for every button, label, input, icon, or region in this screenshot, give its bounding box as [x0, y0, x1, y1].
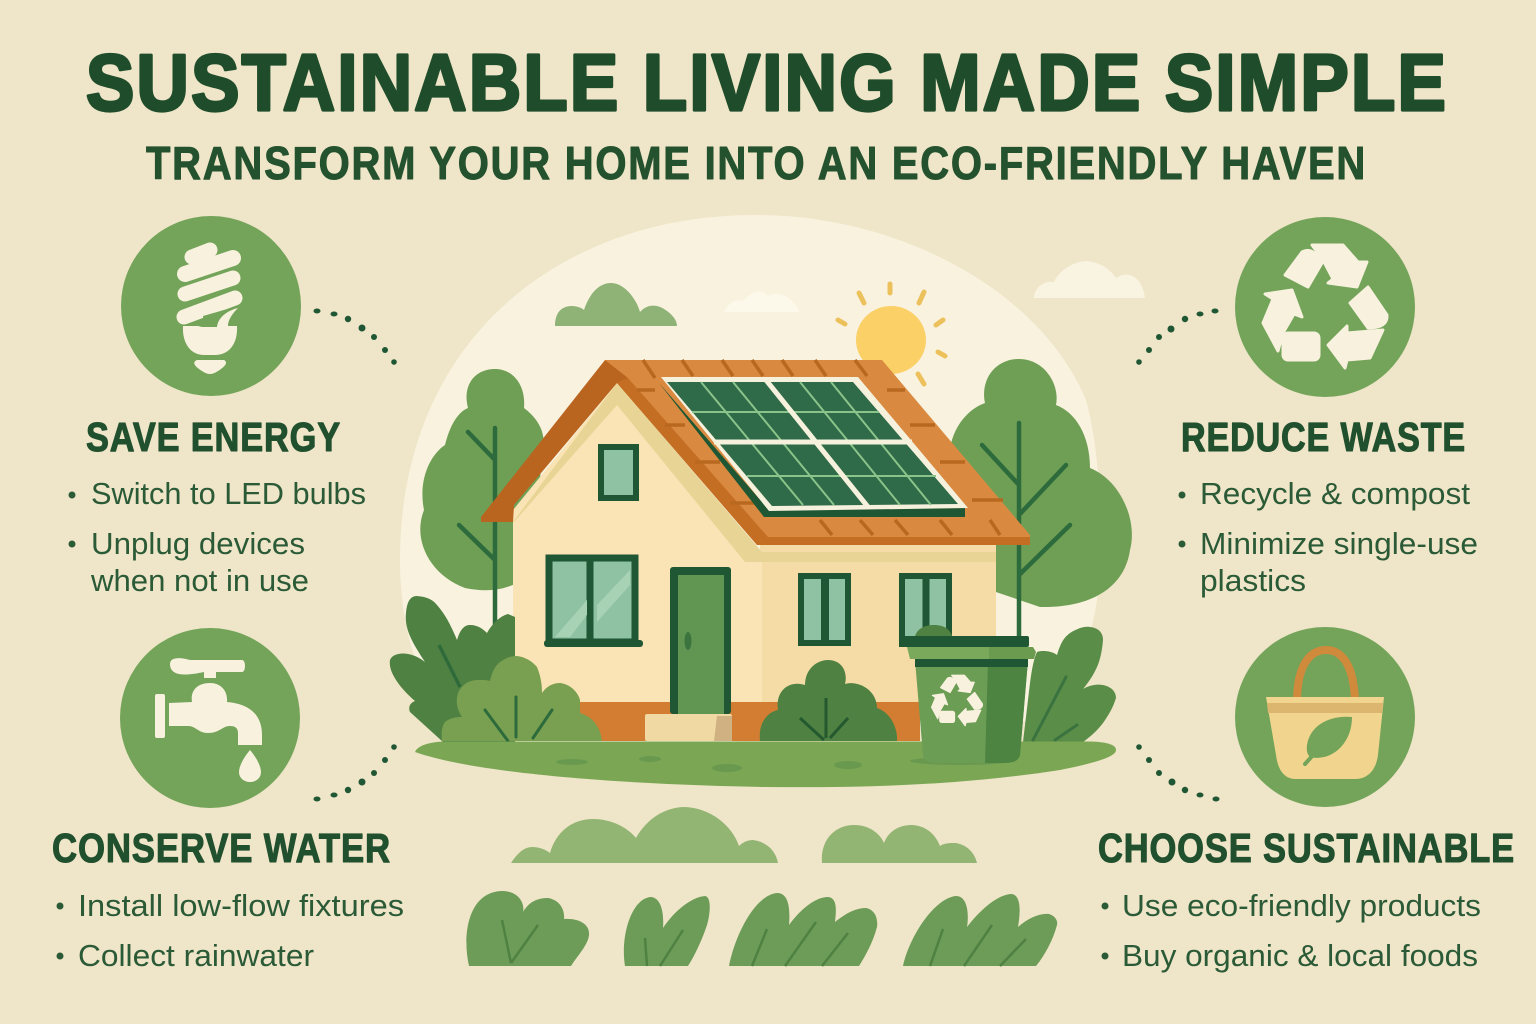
- connector dots: [1136, 744, 1220, 802]
- list: [56, 888, 404, 973]
- recycling bin: [900, 625, 1036, 765]
- window: attic: [601, 447, 636, 498]
- list: [68, 476, 366, 598]
- window: large: [544, 558, 643, 647]
- panel: save energy: [68, 216, 397, 598]
- list: Use eco-friendly products: [1122, 888, 1481, 923]
- window: right two: [902, 576, 949, 644]
- roof: [605, 360, 1030, 545]
- backdrop glow: [400, 215, 1101, 760]
- list: Switch to LED bulbs: [91, 476, 366, 511]
- wall: right: [760, 540, 996, 705]
- house: [481, 360, 1030, 741]
- subtitle: TRANSFORM YOUR HOME INTO AN ECO-FRIENDLY HAVEN: [146, 137, 1367, 189]
- bush: light front: [442, 656, 602, 741]
- list: [1102, 888, 1481, 973]
- solar panel: [659, 377, 968, 517]
- list: plastics: [1200, 563, 1306, 598]
- list: Unplug devices: [91, 526, 305, 561]
- roof tile lines: [637, 360, 1003, 535]
- connector dots: [1136, 308, 1218, 365]
- cloud: white right: [1034, 261, 1145, 298]
- shrub silhouette: wide: [511, 807, 778, 863]
- door step: [645, 714, 732, 741]
- foundation: [580, 702, 920, 741]
- icon: recycle: [1235, 217, 1415, 397]
- icon: water tap: [120, 628, 300, 808]
- heading: REDUCE WASTE: [1181, 414, 1466, 460]
- sun: [838, 284, 945, 384]
- bush: dark left: [390, 596, 515, 742]
- central house scene: [390, 215, 1145, 787]
- wall: front: [513, 383, 762, 705]
- panel: reduce waste: [1136, 217, 1478, 598]
- icon: shopping bag: [1235, 627, 1415, 807]
- connector dots: [314, 308, 397, 365]
- cloud: white small: [724, 291, 799, 312]
- list: Minimize single-use: [1200, 526, 1478, 561]
- list: Collect rainwater: [78, 938, 314, 973]
- list: when not in use: [90, 563, 309, 598]
- list: Install low-flow fixtures: [78, 888, 404, 923]
- bush: middle: [760, 660, 897, 741]
- list: Recycle & compost: [1200, 476, 1470, 511]
- roof shadow: [513, 383, 996, 562]
- decorative bushes: bottom: [466, 807, 1057, 966]
- connector dots: [314, 744, 397, 802]
- leaf cluster 3: [729, 893, 877, 966]
- icon: light bulb: [121, 216, 301, 396]
- leaf cluster 4: [903, 894, 1057, 966]
- panel: choose sustainable: [1098, 627, 1515, 973]
- list: [1178, 476, 1478, 598]
- icon: bin recycle symbol: [932, 675, 982, 726]
- shrub silhouette: narrow: [822, 825, 977, 863]
- panel: conserve water: [52, 628, 404, 973]
- cloud: green: [555, 283, 677, 326]
- leaf cluster 2: [624, 896, 710, 966]
- leaf cluster 1: [466, 891, 589, 966]
- bush: right: [1023, 627, 1116, 742]
- tree: right: [949, 359, 1132, 640]
- list: Buy organic & local foods: [1122, 938, 1478, 973]
- ground: [415, 742, 1116, 787]
- tree: left: [420, 369, 544, 625]
- door: [670, 567, 731, 714]
- window: right one: [801, 576, 848, 643]
- heading: CONSERVE WATER: [52, 825, 391, 871]
- heading: SAVE ENERGY: [86, 414, 341, 460]
